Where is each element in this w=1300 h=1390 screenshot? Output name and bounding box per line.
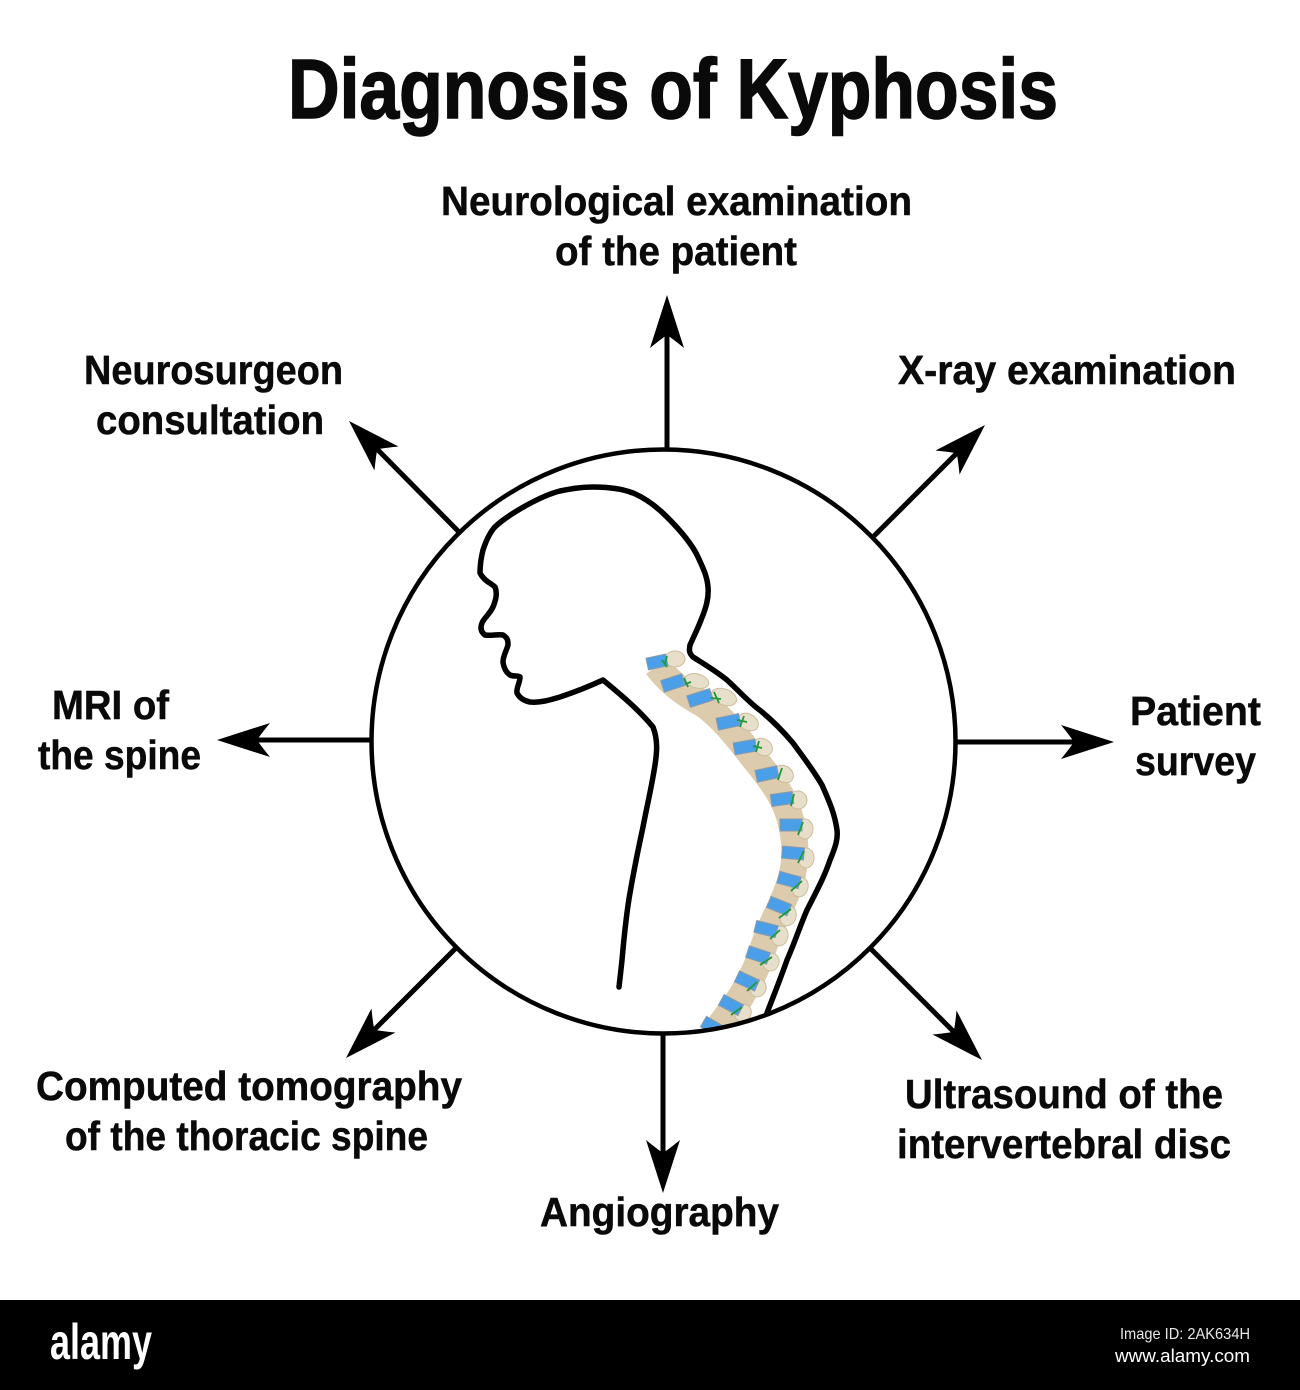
arrow: up right: [874, 413, 997, 536]
footer bar: [0, 1300, 1300, 1390]
intervertebral discs: [646, 654, 804, 1038]
footer image id: Image ID: 2AK634H: [1120, 1326, 1250, 1343]
label: neurological examination: [441, 178, 912, 274]
label: computed tomography: of the thoracic spine: [65, 1113, 428, 1159]
nerve strands: [662, 656, 804, 1015]
spinous processes: [665, 651, 814, 1025]
label: ultrasound: [897, 1071, 1231, 1167]
label: MRI of the spine: the spine: [38, 732, 201, 778]
label: neurosurgeon consultation: [84, 347, 343, 443]
label: MRI of the spine: [38, 682, 201, 778]
spine illustration: [646, 651, 814, 1038]
arrow: left: [217, 723, 371, 757]
arrow: up: [650, 295, 684, 450]
label: angiography: Angiography: [540, 1189, 779, 1235]
label: neurosurgeon consultation: Neurosurgeon: [84, 347, 343, 393]
footer url: www.alamy.com: [1114, 1346, 1250, 1366]
label: neurological examination: Neurological examination: [441, 178, 912, 224]
label: computed tomography: [36, 1063, 462, 1159]
label: neurological examination: of the patient: [555, 228, 797, 274]
arrow: right: [957, 725, 1114, 759]
label: MRI of the spine: MRI of: [52, 682, 169, 728]
footer logo: alamy: [50, 1314, 152, 1370]
label: neurosurgeon consultation: consultation: [96, 397, 324, 443]
label: patient survey: survey: [1135, 738, 1256, 784]
arrow: down: [646, 1034, 680, 1193]
vertebral column: [657, 666, 795, 1034]
head and back silhouette: [480, 487, 837, 1013]
arrow: up left: [337, 409, 459, 532]
label: patient survey: Patient: [1130, 688, 1261, 734]
label: ultrasound: Ultrasound of the: [905, 1071, 1223, 1117]
label: patient survey: [1130, 688, 1261, 784]
label: ultrasound: intervertebral disc: [897, 1121, 1231, 1167]
title: Diagnosis of Kyphosis: [288, 42, 1058, 136]
circle: [372, 450, 956, 1034]
arrow: down right: [870, 948, 994, 1072]
label: x-ray examination: X-ray examination: [898, 347, 1236, 393]
arrow: down left: [334, 948, 456, 1070]
label: computed tomography: Computed tomography: [36, 1063, 462, 1109]
